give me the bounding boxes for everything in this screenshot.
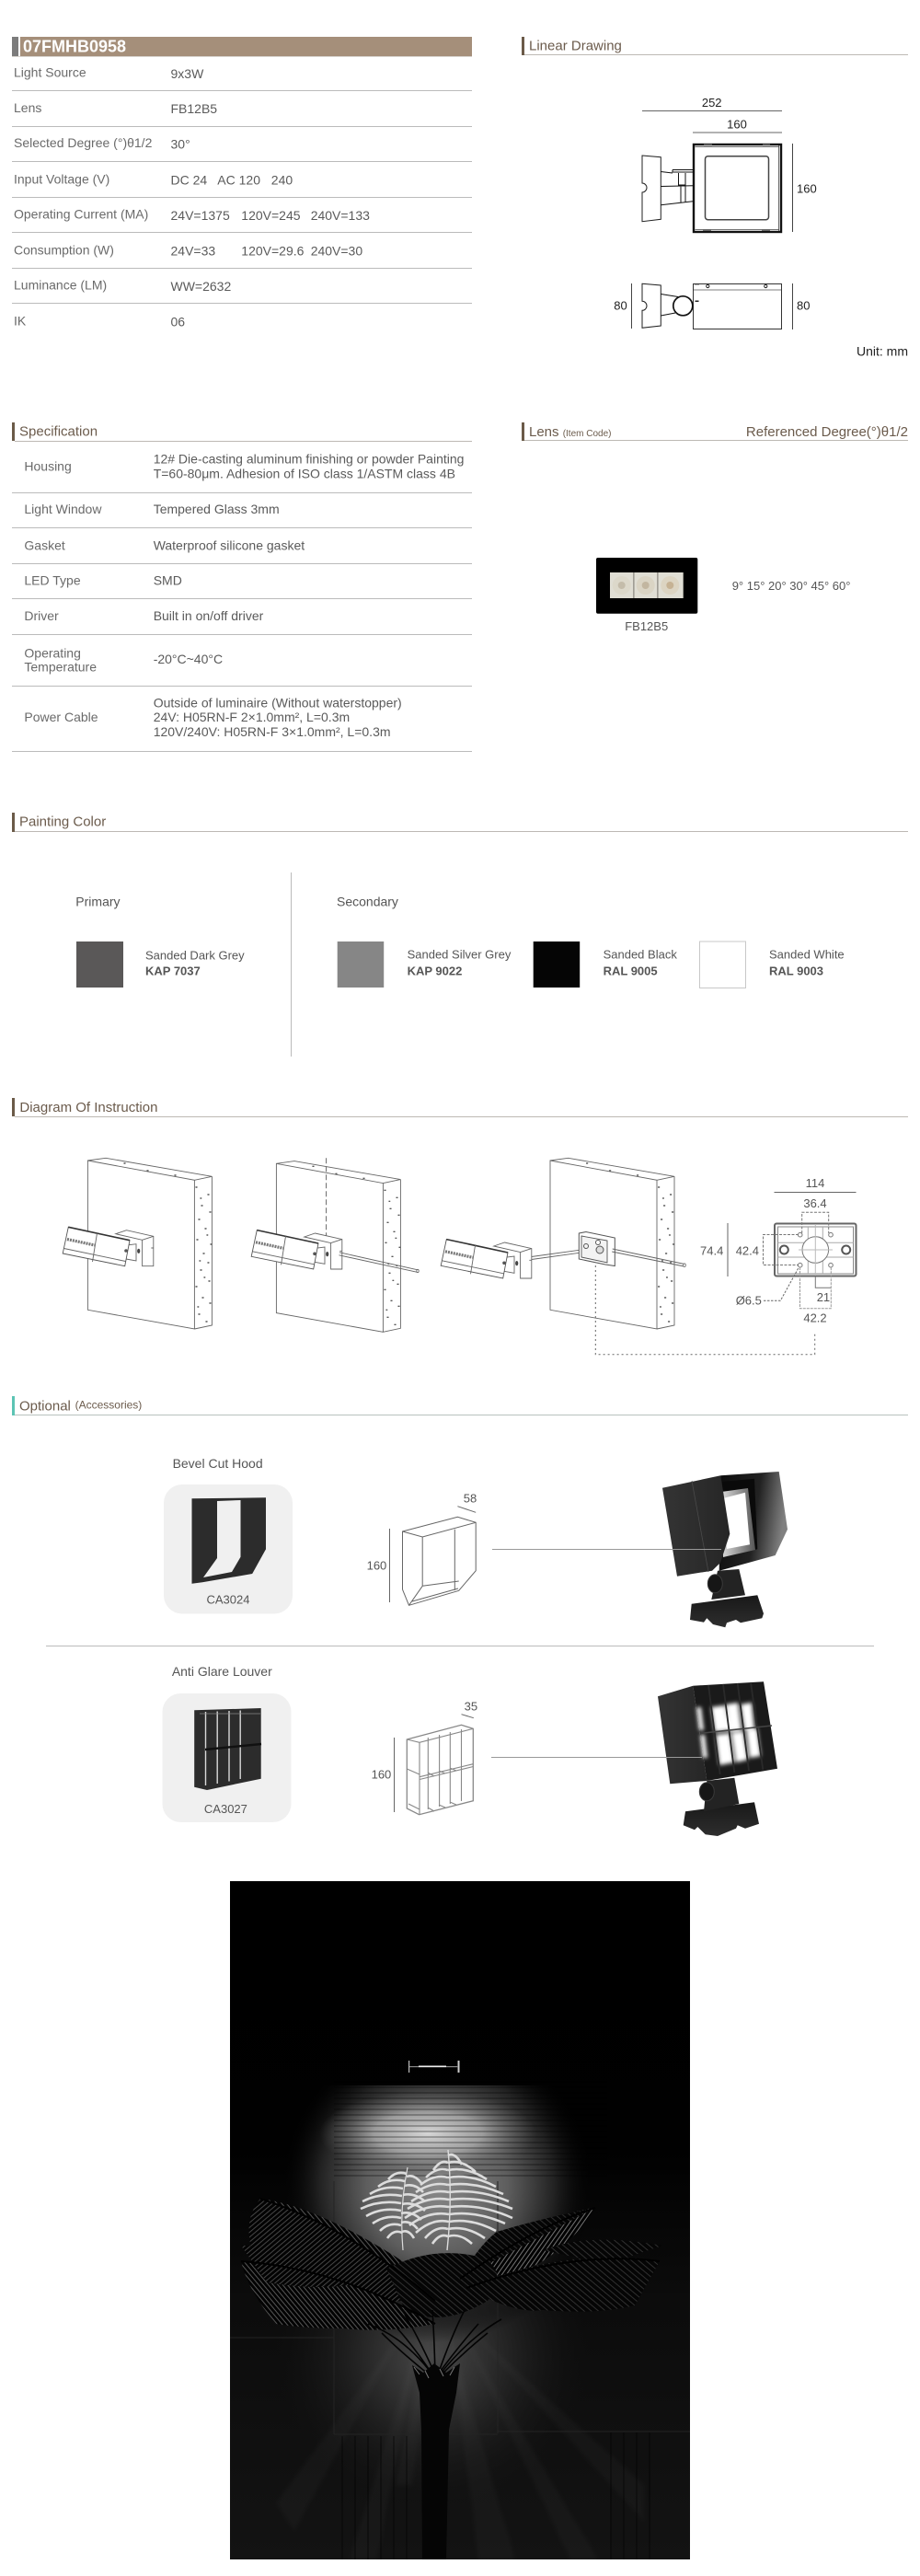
bevel cut hood dimension drawing: 58: [464, 1492, 477, 1506]
parameter table: 30°: [171, 137, 190, 152]
heading: painting color: Painting Color: [19, 814, 106, 830]
photo: night scene with palm tree lit by wall luminaire: [230, 1881, 690, 2559]
heading: specification: Specification: [19, 423, 98, 439]
mounting plate dimension drawing: [700, 1176, 856, 1325]
heading: lens and referenced degree: (Item Code): [563, 429, 611, 439]
linear drawing: front view: 160: [797, 181, 817, 195]
parameter table: 240V=133: [311, 208, 370, 223]
specification table: Housing: [24, 459, 72, 474]
connector line: hood: [492, 1549, 721, 1550]
specification table: Driver: [24, 608, 59, 623]
heading: specification: [12, 422, 472, 442]
parameter table: 24V=33: [171, 243, 215, 258]
specification table: Tempered Glass 3mm: [154, 502, 280, 516]
specification table: Operating: [24, 645, 81, 660]
heading: lens and referenced degree: Referenced Degree(°)θ1/2: [746, 424, 908, 440]
louver dimension drawing: 35: [465, 1699, 477, 1713]
panel: anti glare louver product: [162, 1693, 291, 1822]
specification table: [12, 451, 472, 752]
specification table: Power Cable: [24, 710, 98, 724]
dark foreground fronds: [241, 2199, 662, 2330]
panel: secondary colors: Sanded White: [769, 948, 845, 962]
panel: secondary colors: RAL 9005: [604, 964, 658, 977]
parameter table: FB12B5: [171, 101, 217, 116]
parameter table: [12, 64, 472, 329]
instruction step 1: [63, 1158, 212, 1329]
parameter table: 120V=29.6: [241, 243, 305, 258]
parameter table: 9x3W: [171, 66, 204, 81]
specification table: LED Type: [24, 572, 81, 587]
linear drawing: side view: 80: [797, 299, 810, 313]
parameter table: Lens: [14, 100, 41, 115]
mounting plate dimension drawing: Ø6.5: [736, 1294, 762, 1308]
parameter table: DC 24: [171, 172, 207, 187]
panel: anti glare louver product: CA3027: [204, 1802, 247, 1816]
bright background fronds: [361, 2150, 512, 2250]
parameter table: Input Voltage (V): [14, 171, 109, 186]
dotted connector to mounting plate: [595, 1265, 815, 1355]
accessory title: bevel cut hood: Bevel Cut Hood: [173, 1456, 263, 1471]
parameter table: 24V=1375: [171, 208, 230, 223]
connector line: louver: [491, 1757, 702, 1758]
horizontal wall slats: [334, 2087, 567, 2176]
specification table: Outside of luminaire (Without waterstopper): [154, 695, 402, 710]
panel: primary color: Sanded Dark Grey: [145, 949, 245, 963]
heading: optional accessories: [12, 1396, 908, 1415]
crown stems: [368, 2310, 501, 2374]
parameter table: 120V=245: [241, 208, 301, 223]
louver dimension drawing: 160: [372, 1768, 391, 1782]
heading: optional accessories: Optional: [19, 1399, 71, 1415]
parameter table: 240: [271, 172, 293, 187]
heading: diagram of instruction: [12, 1098, 908, 1117]
instruction step 3: [441, 1158, 685, 1329]
linear drawing: front view: 160: [727, 117, 747, 131]
mounting plate dimension drawing: 114: [806, 1176, 824, 1190]
accessory title: anti glare louver: Anti Glare Louver: [172, 1664, 272, 1679]
specification table: Built in on/off driver: [154, 608, 264, 623]
instruction step 2: [251, 1158, 419, 1332]
luminaire on wall: [408, 2061, 460, 2073]
panel: bevel cut hood product: CA3024: [207, 1592, 249, 1606]
panel: secondary colors: Sanded Silver Grey: [408, 948, 512, 962]
parameter table: Operating Current (MA): [14, 206, 148, 221]
mounting plate dimension drawing: 21: [817, 1290, 830, 1304]
parameter table: Consumption (W): [14, 242, 114, 257]
heading: painting color: [12, 813, 908, 832]
bevel cut hood dimension drawing: [367, 1492, 477, 1605]
heading: linear drawing: Linear Drawing: [529, 38, 622, 53]
specification table: Temperature: [24, 659, 97, 674]
lens module image: [596, 558, 697, 614]
title bar: product code: 07FMHB0958: [23, 38, 126, 56]
specification table: -20°C~40°C: [154, 652, 223, 666]
panel: secondary colors: [337, 894, 845, 988]
mounting plate dimension drawing: 74.4: [700, 1243, 723, 1257]
panel: primary color: [75, 894, 245, 988]
parameter table: 06: [171, 314, 185, 329]
photo: fixture with louver: [658, 1681, 777, 1836]
heading: diagram of instruction: Diagram Of Instruction: [19, 1100, 157, 1115]
parameter table: IK: [14, 313, 27, 328]
palm trunk: [412, 2363, 460, 2559]
title bar: product code: [12, 37, 472, 57]
linear drawing: side view: [614, 283, 810, 329]
linear drawing: front view: 252: [702, 96, 722, 110]
panel: primary color: Primary: [75, 894, 121, 908]
specification table: Gasket: [24, 537, 65, 552]
mounting plate dimension drawing: 36.4: [803, 1196, 827, 1210]
mounting plate dimension drawing: 42.4: [736, 1243, 759, 1257]
light rays below palm: [276, 2328, 644, 2559]
specification table: 12# Die-casting aluminum finishing or powder Painting: [154, 451, 464, 466]
panel: bevel cut hood product: [164, 1484, 293, 1614]
specification table: SMD: [154, 572, 182, 587]
specification table: 24V: H05RN-F 2×1.0mm², L=0.3m: [154, 710, 350, 724]
panel: secondary colors: Secondary: [337, 894, 398, 908]
parameter table: Light Source: [14, 64, 86, 79]
beam angle options: 9° 15° 20° 30° 45° 60°: [732, 579, 850, 593]
bevel cut hood dimension drawing: 160: [367, 1559, 386, 1573]
panel: primary color: KAP 7037: [145, 964, 201, 977]
parameter table: Selected Degree (°)θ1/2: [14, 135, 153, 150]
wide glow on wall: [302, 2085, 572, 2337]
panel: secondary colors: Sanded Black: [604, 948, 677, 962]
louver dimension drawing: [372, 1699, 477, 1815]
linear drawing: front view: [642, 96, 817, 232]
lens label: FB12B5: [625, 619, 668, 633]
specification table: 120V/240V: H05RN-F 3×1.0mm², L=0.3m: [154, 724, 391, 739]
parameter table: Luminance (LM): [14, 277, 107, 292]
panel: secondary colors: RAL 9003: [769, 964, 823, 977]
specification table: Light Window: [24, 502, 102, 516]
glow on wall below palm: [322, 2305, 543, 2459]
linear drawing: side view: 80: [614, 299, 627, 313]
bright pool of light: [325, 2097, 528, 2170]
unit note: Unit: mm: [857, 344, 908, 359]
photo: fixture with bevel cut hood: [662, 1472, 788, 1627]
parameter table: 240V=30: [311, 243, 362, 258]
specification table: Waterproof silicone gasket: [154, 537, 305, 552]
mounting plate dimension drawing: 42.2: [803, 1311, 827, 1325]
panel: secondary colors: KAP 9022: [408, 964, 462, 977]
wall panel seams: [230, 2181, 690, 2434]
heading: lens and referenced degree: [522, 422, 908, 441]
specification table: T=60-80μm. Adhesion of ISO class 1/ASTM class 4B: [154, 466, 455, 480]
parameter table: AC 120: [217, 172, 260, 187]
parameter table: WW=2632: [171, 279, 231, 294]
heading: lens and referenced degree: Lens: [529, 424, 559, 440]
heading: optional accessories: (Accessories): [75, 1399, 142, 1412]
heading: linear drawing: [522, 37, 908, 55]
